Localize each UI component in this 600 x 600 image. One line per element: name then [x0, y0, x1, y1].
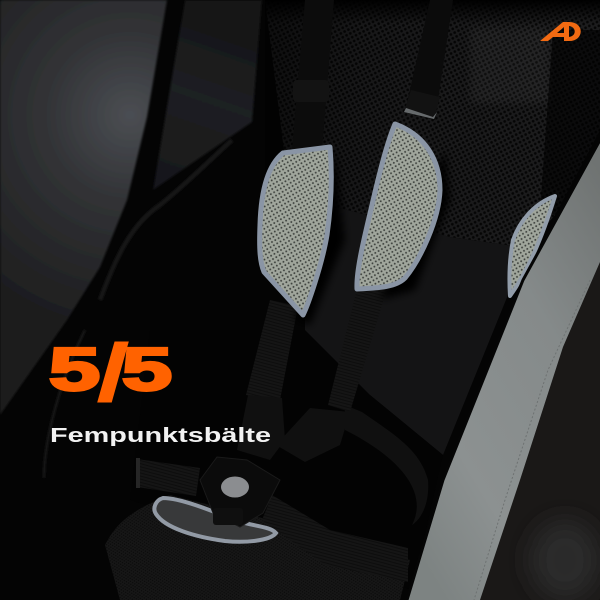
left harness strap: [237, 0, 334, 460]
label: Fempunktsbälte: Fempunktsbälte: [50, 425, 271, 447]
cushion shadow: [130, 330, 443, 590]
right harness strap: [276, 0, 453, 462]
logo: AD: [540, 22, 581, 41]
headline: 5/5: [49, 328, 172, 419]
seat cushion mesh: [105, 495, 410, 600]
shoulder pad shadows: [295, 150, 450, 325]
headline: 5/5: /: [96, 328, 130, 419]
lap straps: [136, 458, 408, 582]
center shoulder pad: [357, 124, 440, 289]
buckle: [200, 457, 280, 527]
right hip strap: [345, 405, 428, 525]
headline: 5/5: 5: [122, 336, 172, 403]
left shoulder pad: [260, 147, 331, 315]
seat lower fabric panel: [305, 205, 527, 455]
crotch pad: [154, 498, 276, 542]
grey side fabric: [407, 140, 600, 600]
headline: 5/5: 5: [49, 336, 100, 403]
right shoulder pad: [509, 196, 555, 296]
seat back mesh: [265, 0, 600, 250]
